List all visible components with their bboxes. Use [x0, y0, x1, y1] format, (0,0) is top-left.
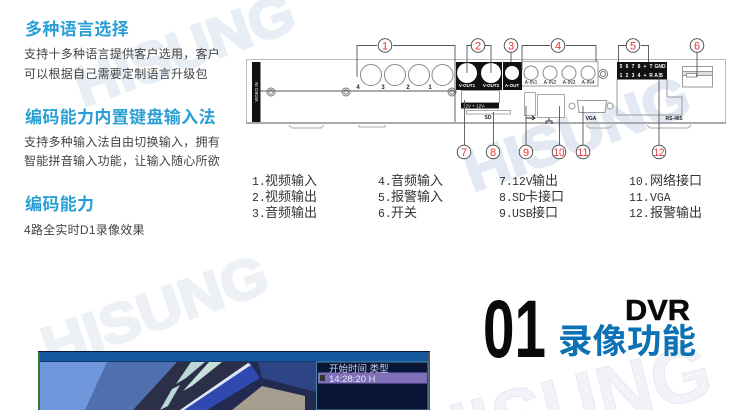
text: keyboard input: 智能拼音输入功能，让输入随心所欲 [24, 153, 220, 168]
port legend: 1. [252, 176, 266, 189]
label strip: VIDEO IN [254, 82, 259, 102]
DVR rear panel diagram [246, 39, 726, 159]
12V output [461, 90, 500, 108]
audio input connectors: A-IN1 [525, 80, 538, 86]
callout digits: 7 [461, 147, 467, 159]
port legend: 5. [378, 192, 392, 205]
section number: 01 [483, 284, 546, 375]
text: languages [24, 46, 220, 81]
feet [289, 125, 691, 128]
alarm terminal block: 8 [638, 64, 641, 70]
callout digits: 1 [382, 40, 388, 52]
port legend: 视频输出 [265, 186, 317, 205]
alarm terminal block: 4 [638, 73, 641, 79]
alarm terminal block: RS-485 [666, 116, 683, 122]
left edge [38, 352, 40, 410]
VGA port: VGA [586, 116, 597, 122]
port legend: 4. [378, 176, 392, 189]
port legend: 接口 [532, 202, 558, 221]
port legend: 卡接口 [525, 186, 564, 205]
watermark: centre right: HISUNG [456, 64, 698, 203]
chassis [246, 60, 726, 124]
port legend: 8. [499, 192, 513, 205]
callout digits: 8 [490, 147, 496, 159]
section title [558, 295, 696, 361]
callout digits: 11 [578, 147, 588, 159]
callout digits: 5 [630, 40, 636, 52]
label strip [252, 62, 260, 122]
text: languages: 可以根据自己需要定制语言升级包 [24, 66, 208, 81]
alarm terminal block: 1 [620, 73, 623, 79]
audio input connectors: A-IN3 [563, 80, 576, 86]
callout numbers [378, 39, 704, 159]
text: keyboard input [24, 134, 220, 168]
alarm terminal block: 7 [632, 64, 635, 70]
audio input connectors [522, 62, 598, 86]
audio output block [503, 62, 522, 90]
feature list [24, 19, 220, 237]
row icon [320, 375, 325, 381]
port legend: 11. [629, 192, 650, 205]
port legend [252, 170, 702, 221]
SD slot [466, 110, 510, 121]
video input connectors [356, 64, 453, 91]
callout digits: 10 [554, 147, 564, 159]
alarm terminal block: 6 [626, 64, 629, 70]
text: encoding: 4路全实时D1录像效果 [24, 222, 145, 237]
port legend: 音频输入 [391, 170, 443, 189]
video input connectors: 3 [381, 85, 385, 91]
port legend: 9. [499, 208, 513, 221]
port legend: 报警输入 [391, 186, 443, 205]
port legend: 6. [378, 208, 392, 221]
playback screenshot [38, 351, 430, 410]
12V output: 12V + 12V- [463, 104, 486, 108]
port legend: 12V [512, 176, 533, 189]
video output block: V-OUT2 [483, 83, 500, 88]
callout digits: 6 [694, 40, 700, 52]
callout digits: 9 [523, 147, 529, 159]
port legend: 12. [629, 208, 650, 221]
heading: keyboard input: 编码能力内置键盘输入法 [25, 107, 216, 127]
port legend: 网络接口 [650, 170, 702, 189]
port legend: 音频输出 [265, 202, 317, 221]
heading: encoding: 编码能力 [25, 194, 94, 214]
port legend: 开关 [391, 202, 417, 221]
SD slot: SD [485, 115, 492, 121]
alarm terminal block: T [649, 64, 653, 70]
port legend: SD [512, 192, 526, 205]
heading: languages: 多种语言选择 [25, 19, 129, 39]
port legend: 视频输入 [265, 170, 317, 189]
USB port [524, 92, 536, 120]
window frame [38, 351, 430, 410]
port legend: 2. [252, 192, 266, 205]
video input connectors: 1 [428, 85, 432, 91]
selected row [318, 372, 427, 384]
watermark: lower left: HISUNG [33, 242, 276, 378]
alarm terminal block: 3 [632, 73, 635, 79]
title bar [40, 352, 428, 362]
port legend: 3. [252, 208, 266, 221]
recording list panel [316, 362, 428, 410]
VGA port [569, 100, 613, 122]
video output block: V-OUT1 [459, 83, 476, 88]
list header: 开始时间 类型 [329, 363, 389, 375]
text: keyboard input: 支持多种输入法自由切换输入，拥有 [24, 134, 220, 149]
audio output block: A-OUT [505, 83, 519, 88]
DVR label: DVR [625, 295, 690, 327]
alarm terminal block: R [649, 73, 653, 79]
audio input connectors: A-IN4 [582, 80, 595, 86]
alarm terminal block [617, 62, 683, 122]
text: languages: 支持十多种语言提供客户选用，客户 [24, 46, 220, 61]
alarm terminal block: 2 [626, 73, 629, 79]
row text: 14:28:20 H [329, 374, 376, 385]
port legend: 输出 [532, 170, 558, 189]
callout digits: 12 [654, 147, 664, 159]
video frame [40, 362, 316, 410]
panel line and screws [260, 70, 608, 96]
alarm terminal block: 5 [620, 64, 623, 70]
port legend: USB [512, 208, 533, 221]
video input connectors: 4 [356, 85, 360, 91]
alarm terminal block: B [659, 73, 663, 79]
leader lines [357, 46, 697, 145]
video output block [456, 62, 502, 90]
video input connectors: 2 [406, 85, 410, 91]
callout digits: 2 [475, 40, 481, 52]
right edge [428, 352, 430, 410]
port legend: 报警输出 [650, 202, 702, 221]
section title text: 录像功能 [558, 323, 696, 361]
callout digits: 4 [555, 40, 561, 52]
audio input connectors: A-IN2 [544, 80, 557, 86]
alarm terminal block: + [644, 73, 647, 79]
port legend: 10. [629, 176, 650, 189]
power switch [682, 66, 712, 87]
network port [538, 94, 564, 124]
alarm terminal block: GND [654, 64, 666, 70]
port legend: 7. [499, 176, 513, 189]
callout digits: 3 [508, 40, 514, 52]
callout digits [382, 40, 700, 159]
port legend: VGA [650, 192, 671, 205]
alarm terminal block: A [654, 73, 658, 79]
alarm terminal block: + [644, 64, 647, 70]
